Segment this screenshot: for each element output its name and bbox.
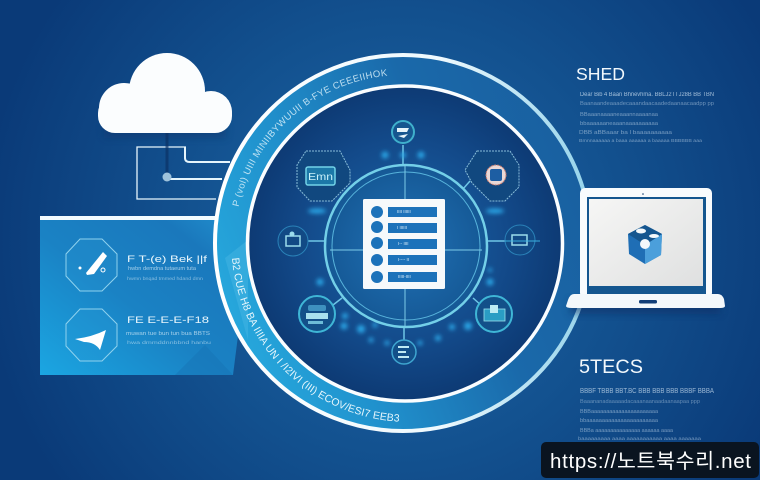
text lines: lower right bbox=[578, 388, 714, 441]
text lines: top right: bbaaaaaaneaaanaaaaaaaaaa bbox=[580, 121, 658, 127]
text lines: top right bbox=[579, 92, 714, 143]
ring text: upper arc: P (vol) UIII MINIIBYWUUII B-FYE CEEEIIHOK bbox=[232, 69, 388, 206]
card rows: IIII IIIIII bbox=[397, 209, 411, 214]
text block: second feature: muwan tue bun tun bua BBTS bbox=[126, 331, 211, 337]
text lines: lower right: BBBa aaaaaaaaaaaaaaa aaaaaa aaaa bbox=[580, 428, 673, 434]
text lines: lower right: bbaaaaaaaaaaaaaaaaaaaaaaa bbox=[580, 418, 658, 424]
text lines: lower right: Baaananadaaaaadacaaanaanaadaanaapaa ppp bbox=[580, 399, 700, 405]
heading: STECS: 5TECS bbox=[579, 357, 643, 378]
text block: second feature: hwa dmmddnnbbnd hanbu bbox=[127, 340, 212, 345]
node: upper right hexagon bbox=[465, 151, 519, 201]
inner disc bbox=[248, 86, 562, 401]
card rows: I IIIIII bbox=[397, 225, 407, 230]
ring text: lower arc: B2 CUE H8 BA IIIIA UN I /I2IVI (III) ECOV/ESI7 EEB3 bbox=[232, 258, 400, 422]
text lines: top right: Dear Bib 4 Baan Bhnevhma. BBLJ2TTJ28B BB TBN bbox=[580, 92, 714, 98]
node: upper left hexagon: Emn bbox=[308, 172, 333, 183]
text lines: lower right: BBBF TBBB BBT.BC BBB BBB BBB BBBF BBBA bbox=[580, 388, 714, 395]
text block: first feature: hwbn demdna tutaeum tuta bbox=[128, 266, 196, 272]
node: top bbox=[392, 121, 414, 143]
list card bbox=[363, 199, 445, 289]
card rows: I-- IIII bbox=[398, 241, 408, 246]
heading: SHED: SHED bbox=[576, 64, 625, 84]
outer ring bbox=[215, 55, 591, 431]
node: upper left hexagon bbox=[297, 151, 350, 201]
watermark: https://노트북수리.net bbox=[550, 450, 751, 473]
wires connecting cloud bbox=[137, 133, 230, 199]
card rows: IIIII-IIII bbox=[398, 274, 411, 279]
ring wedge highlight bbox=[225, 240, 248, 340]
node: bottom bbox=[392, 340, 416, 364]
text lines: top right: DBB aBBaaar ba l baaaaaaaaaa bbox=[579, 130, 672, 136]
text block: second feature: FE E-E-E-F18 bbox=[127, 315, 209, 326]
text block: first feature: F T-(e) Bek ||f bbox=[127, 254, 207, 265]
text lines: lower right: BBBaaaaaaaaaaaaaaaaaaaaaa bbox=[580, 409, 658, 415]
text lines: lower right: baaaaaaaaa aaaa aaaaaaaaaaa aaaa aaaaaaa bbox=[578, 436, 702, 441]
card rows bbox=[371, 206, 437, 283]
card rows: I---- II bbox=[398, 257, 409, 262]
text lines: top right: Baanaandeaaadecaaandaacaadedaanaacaadpp pp bbox=[580, 101, 714, 107]
text lines: top right: Bmnnaaaaaa a baaa aaaaaa a baaaaa BBBBBB aaa bbox=[579, 138, 703, 143]
node: right bbox=[505, 225, 540, 255]
laptop base bbox=[566, 294, 725, 308]
laptop bbox=[566, 188, 725, 314]
icon: pencil octagon bbox=[66, 239, 117, 291]
node: lower left bbox=[299, 296, 335, 332]
icon: brush octagon bbox=[66, 309, 117, 361]
text block: first feature: hwmn bnqad tmmed hdand dmn bbox=[127, 276, 204, 281]
text block: first feature bbox=[127, 254, 207, 281]
connectors and glow dots bbox=[308, 145, 505, 346]
watermark bbox=[541, 442, 759, 478]
icon: cube bbox=[628, 225, 662, 264]
node: left bbox=[278, 226, 308, 256]
text lines: top right: BBaaanaaaaneaaannaaaanaa bbox=[580, 112, 658, 118]
heading and text: top right bbox=[576, 64, 714, 143]
icon: cloud bbox=[98, 53, 232, 138]
laptop lid bbox=[580, 188, 712, 298]
heading and text: lower right bbox=[578, 357, 714, 441]
panel: left features bbox=[40, 216, 240, 375]
node: lower right bbox=[476, 296, 512, 332]
ring diagram bbox=[213, 53, 585, 433]
text block: second feature bbox=[126, 315, 212, 345]
hub circle bbox=[325, 165, 487, 327]
